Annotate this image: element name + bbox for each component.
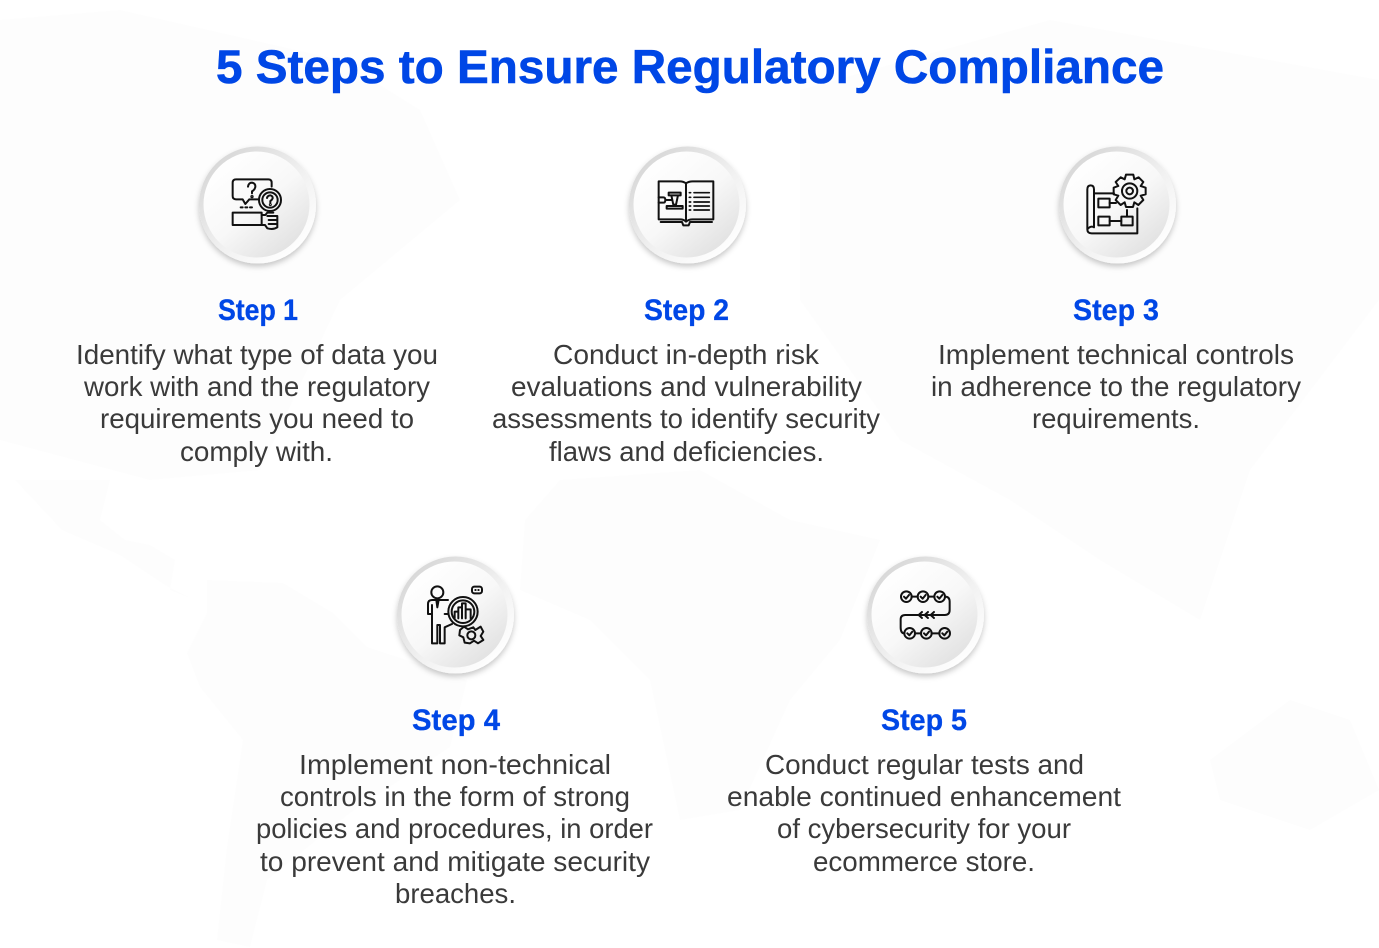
- text block: step 1: comply with.: [180, 436, 333, 467]
- text block: step 1: [76, 339, 438, 467]
- heading: step 4: Step 4: [412, 704, 500, 737]
- text block: step 5: ecommerce store.: [813, 846, 1035, 877]
- text block: step 1: work with and the regulatory: [83, 371, 430, 402]
- text block: step 2: [492, 339, 880, 467]
- text block: step 4: Implement non-technical: [299, 749, 611, 780]
- text block: step 4: [256, 749, 653, 909]
- title: 5 Steps to Ensure Regulatory Compliance: [216, 40, 1164, 93]
- icon: blueprint and gear: [1059, 146, 1176, 264]
- text block: step 1: requirements you need to: [100, 403, 414, 434]
- panel: step 4: [256, 556, 653, 909]
- panel: step 3: [931, 146, 1301, 434]
- heading: step 3: Step 3: [1073, 294, 1159, 327]
- panel: step 1: [76, 146, 438, 467]
- text block: step 3: [931, 339, 1301, 434]
- text block: step 4: breaches.: [395, 878, 516, 909]
- text block: step 2: flaws and deficiencies.: [549, 436, 824, 467]
- text block: step 2: Conduct in-depth risk: [553, 339, 819, 370]
- text block: step 4: controls in the form of strong: [280, 781, 630, 812]
- text block: step 2: evaluations and vulnerability: [511, 371, 862, 402]
- text block: step 4: policies and procedures, in order: [256, 813, 653, 844]
- panel: step 2: [492, 146, 880, 467]
- icon: question and magnifier: [199, 146, 316, 264]
- heading: step 5: Step 5: [881, 704, 967, 737]
- text block: step 5: of cybersecurity for your: [777, 813, 1071, 844]
- text block: step 5: [727, 749, 1121, 877]
- icon: law book: [629, 146, 746, 264]
- text block: step 5: Conduct regular tests and: [765, 749, 1084, 780]
- text block: step 2: assessments to identify security: [492, 403, 880, 434]
- text block: step 4: to prevent and mitigate security: [260, 846, 650, 877]
- text block: step 5: enable continued enhancement: [727, 781, 1121, 812]
- icon: analyst with chart: [397, 556, 514, 674]
- heading: step 2: Step 2: [644, 294, 729, 327]
- panel: step 5: [727, 556, 1121, 877]
- icon: checklist process: [867, 556, 984, 674]
- text block: step 3: Implement technical controls: [938, 339, 1294, 370]
- heading: step 1: Step 1: [218, 294, 298, 327]
- text block: step 1: Identify what type of data you: [76, 339, 438, 370]
- text block: step 3: in adherence to the regulatory: [931, 371, 1301, 402]
- text block: step 3: requirements.: [1032, 403, 1200, 434]
